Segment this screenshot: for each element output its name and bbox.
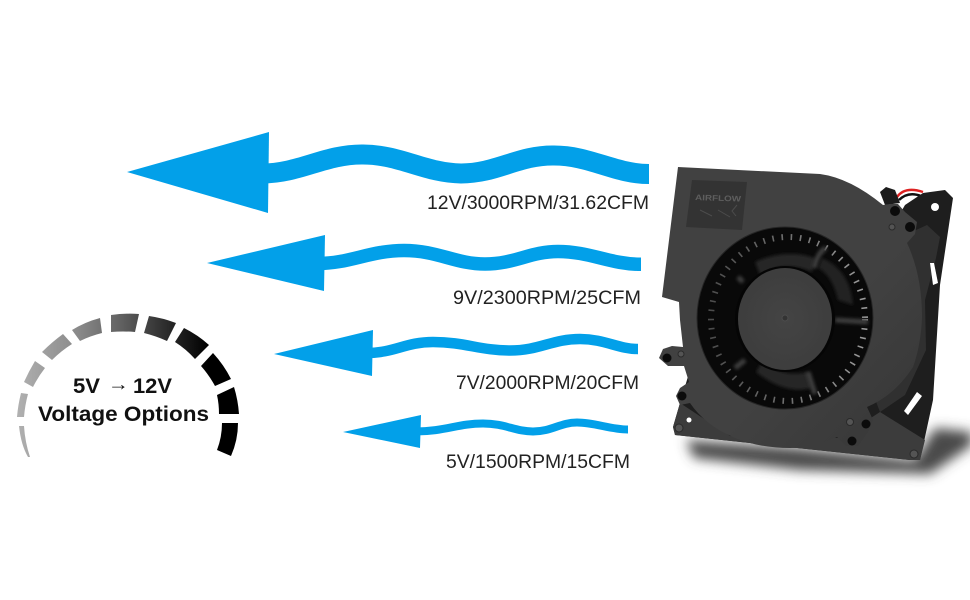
label: 7V speed and airflow: 7V/2000RPM/20CFM: [456, 373, 639, 394]
side wall: [860, 225, 940, 412]
impeller floor: [755, 254, 853, 390]
gauge title: Voltage Options: [38, 403, 209, 426]
blower fan: [659, 167, 970, 474]
gauge title: 5V: [73, 375, 100, 398]
airflow label plate: [686, 180, 747, 230]
hub shadow rim: [735, 266, 835, 372]
plate lower rim: [673, 403, 925, 460]
connector wires: [880, 187, 923, 205]
label: 9V speed and airflow: 9V/2300RPM/25CFM: [453, 288, 641, 309]
mounting holes: [662, 206, 915, 446]
gauge segments: [17, 314, 239, 457]
airflow label plate: AIRFLOW: [695, 193, 742, 204]
arrow: 9V airflow: [207, 235, 641, 291]
back plate: [673, 190, 953, 460]
arrow: 7V airflow: [274, 330, 638, 376]
hub center pin: [782, 315, 788, 321]
arrow: 5V airflow: [343, 415, 628, 448]
gauge title: →: [108, 374, 129, 394]
gauge title: 12V: [133, 375, 172, 398]
label: 12V speed and airflow: 12V/3000RPM/31.62CFM: [427, 193, 649, 214]
label: 5V speed and airflow: 5V/1500RPM/15CFM: [446, 452, 630, 473]
screws: [675, 224, 918, 458]
scroll housing: [659, 167, 922, 448]
arrow: 12V airflow: [127, 132, 649, 213]
impeller blades: [711, 237, 865, 401]
impeller opening: [697, 227, 873, 409]
gauge title: [38, 374, 209, 426]
fan shadow: [686, 428, 970, 474]
hub struts: [735, 248, 868, 394]
mounting slots: [686, 203, 939, 422]
fan hub: [738, 268, 832, 370]
voltage gauge: [17, 314, 239, 457]
